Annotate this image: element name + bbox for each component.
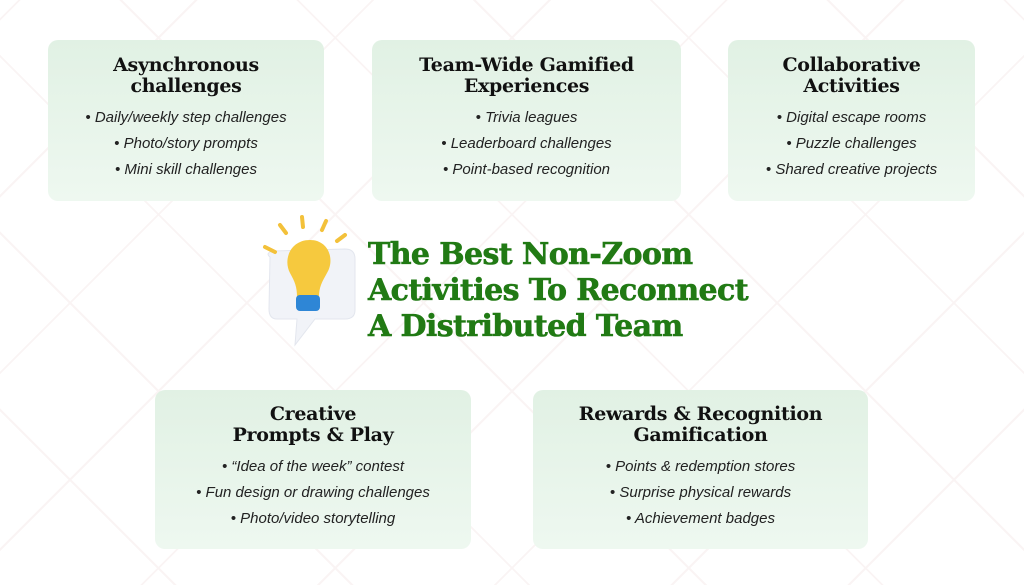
card: team-wide gamified: Experiences	[464, 75, 589, 97]
title	[367, 237, 749, 344]
card: team-wide gamified: • Point-based recognition	[443, 161, 610, 178]
card: creative prompts: Creative	[270, 403, 356, 425]
card: team-wide gamified: Team-Wide Gamified	[419, 54, 634, 76]
title: A Distributed Team	[368, 309, 683, 344]
card: rewards: • Points & redemption stores	[606, 458, 795, 475]
card: team-wide gamified: • Leaderboard challenges	[441, 135, 612, 152]
card: creative prompts: • Fun design or drawing challenges	[196, 484, 430, 501]
card: asynchronous challenges: challenges	[130, 75, 242, 97]
card: collaborative: Activities	[803, 75, 900, 97]
card: rewards: Rewards & Recognition	[579, 403, 822, 425]
card: asynchronous challenges: Asynchronous	[113, 54, 259, 76]
card: rewards	[533, 390, 868, 549]
card: collaborative: • Digital escape rooms	[777, 109, 926, 126]
card: asynchronous challenges: • Mini skill challenges	[115, 161, 257, 178]
title: Activities To Reconnect	[368, 273, 748, 308]
card: rewards: • Achievement badges	[626, 510, 775, 527]
icon: lightbulb in speech bubble	[262, 215, 356, 346]
card: rewards: Gamification	[633, 424, 768, 446]
card: collaborative	[728, 40, 975, 201]
card: creative prompts	[155, 390, 471, 549]
card: creative prompts: • “Idea of the week” contest	[222, 458, 404, 475]
title: The Best Non-Zoom	[368, 237, 692, 272]
card: collaborative: • Shared creative projects	[766, 161, 937, 178]
card: asynchronous challenges: • Daily/weekly step challenges	[85, 109, 287, 126]
card: collaborative: • Puzzle challenges	[786, 135, 917, 152]
card: team-wide gamified: • Trivia leagues	[476, 109, 577, 126]
card: team-wide gamified	[372, 40, 681, 201]
card: collaborative: Collaborative	[782, 54, 921, 76]
card: asynchronous challenges	[48, 40, 324, 201]
card: creative prompts: • Photo/video storytelling	[231, 510, 395, 527]
card: creative prompts: Prompts & Play	[233, 424, 393, 446]
card: asynchronous challenges: • Photo/story prompts	[114, 135, 258, 152]
card: rewards: • Surprise physical rewards	[610, 484, 791, 501]
